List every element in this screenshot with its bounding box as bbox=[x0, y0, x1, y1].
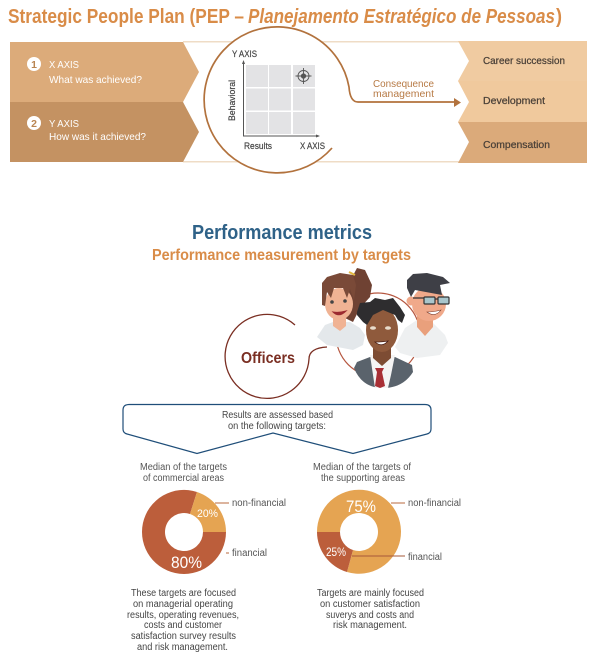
donut chart: 75 / 25: 75% bbox=[346, 497, 376, 516]
panel: X axis chevron: What was achieved? bbox=[49, 74, 142, 86]
text: commercial description: on managerial operating bbox=[133, 599, 233, 610]
heading: performance metrics: Performance metrics bbox=[192, 222, 372, 244]
chart: 9-box matrix: Behavioral bbox=[227, 80, 238, 121]
legend: non-financial and financial: financial bbox=[232, 548, 267, 559]
panel: Y axis chevron: How was it achieved? bbox=[49, 131, 146, 143]
callout box: results assessed bbox=[123, 404, 431, 454]
icon: man with tie bbox=[354, 298, 413, 388]
text: commercial description bbox=[127, 588, 239, 653]
donut chart: 80 / 20: 80% bbox=[171, 553, 202, 572]
text: commercial description: costs and customer bbox=[144, 620, 223, 631]
panel: commercial areas bbox=[127, 462, 286, 653]
icon: target bbox=[296, 68, 312, 84]
legend: non-financial and financial: financial bbox=[408, 552, 442, 563]
callout box: results assessed: on the following targets: bbox=[228, 421, 326, 432]
panel: strategic plan diagram bbox=[10, 27, 587, 173]
heading: commercial targets: of commercial areas bbox=[143, 473, 224, 484]
donut chart: 75 / 25 bbox=[317, 490, 401, 574]
text: supporting description: suverys and costs and bbox=[326, 610, 414, 621]
donut chart: 80 / 20 bbox=[142, 490, 226, 574]
panel: Y axis chevron: Y AXIS bbox=[49, 119, 79, 130]
chart: 9-box matrix bbox=[227, 49, 325, 152]
text: supporting description: Targets are mainly focused bbox=[317, 588, 424, 599]
panel: outcomes: Career succession bbox=[483, 55, 565, 67]
panel: outcomes bbox=[458, 41, 587, 163]
chart: 9-box matrix: Results bbox=[244, 141, 272, 152]
panel: X axis chevron bbox=[10, 42, 199, 102]
text: commercial description: and risk management. bbox=[137, 642, 228, 653]
legend: non-financial and financial bbox=[215, 498, 286, 559]
panel: X axis chevron: X AXIS bbox=[49, 60, 79, 71]
title: ) bbox=[556, 6, 562, 28]
text: commercial description: These targets are focused bbox=[131, 588, 236, 599]
legend: non-financial and financial: non-financial bbox=[232, 498, 286, 509]
subheading: measurement by targets: Performance measurement by targets bbox=[152, 247, 411, 264]
chart: 9-box matrix: Y AXIS bbox=[232, 49, 257, 60]
title bbox=[8, 6, 562, 28]
label: consequence management bbox=[373, 78, 434, 100]
heading: supporting targets: the supporting areas bbox=[321, 473, 405, 484]
donut chart: 80 / 20: 20% bbox=[197, 508, 218, 520]
text: supporting description: on customer satisfaction bbox=[320, 599, 420, 610]
callout: officers: Officers bbox=[241, 350, 295, 367]
icon: woman bbox=[317, 268, 372, 350]
callout: officers bbox=[225, 314, 327, 398]
heading: supporting targets: Median of the targets of bbox=[313, 462, 411, 473]
heading: commercial targets bbox=[140, 462, 227, 484]
legend: non-financial and financial bbox=[352, 498, 461, 563]
panel: outcomes: Development bbox=[483, 95, 545, 107]
panel: outcomes: Compensation bbox=[483, 139, 550, 151]
title: Planejamento Estratégico de Pessoas bbox=[248, 6, 555, 28]
label: consequence management: Consequence bbox=[373, 78, 434, 90]
heading: supporting targets bbox=[313, 462, 411, 484]
callout box: results assessed: Results are assessed based bbox=[222, 410, 333, 421]
donut chart: 75 / 25: 25% bbox=[326, 545, 346, 559]
text: supporting description: risk management. bbox=[333, 620, 407, 631]
text: commercial description: results, operating revenues, bbox=[127, 610, 239, 621]
ring behind people bbox=[336, 293, 420, 377]
circle frame with consequence arrow bbox=[204, 27, 455, 173]
heading: commercial targets: Median of the targets bbox=[140, 462, 227, 473]
arrow head bbox=[454, 98, 461, 107]
title: Strategic People Plan (PEP – bbox=[8, 6, 244, 28]
panel: X axis chevron: 1 bbox=[31, 59, 37, 71]
panel: Y axis chevron bbox=[10, 102, 199, 162]
legend: non-financial and financial: non-financial bbox=[408, 498, 461, 509]
text: commercial description: satisfaction survey results bbox=[131, 631, 236, 642]
chart: 9-box matrix: X AXIS bbox=[300, 141, 325, 152]
panel: supporting areas bbox=[313, 462, 461, 631]
panel: Y axis chevron: 2 bbox=[31, 118, 37, 130]
label: consequence management: management bbox=[373, 88, 434, 100]
icon: man with glasses bbox=[395, 273, 450, 358]
text: supporting description bbox=[317, 588, 424, 631]
